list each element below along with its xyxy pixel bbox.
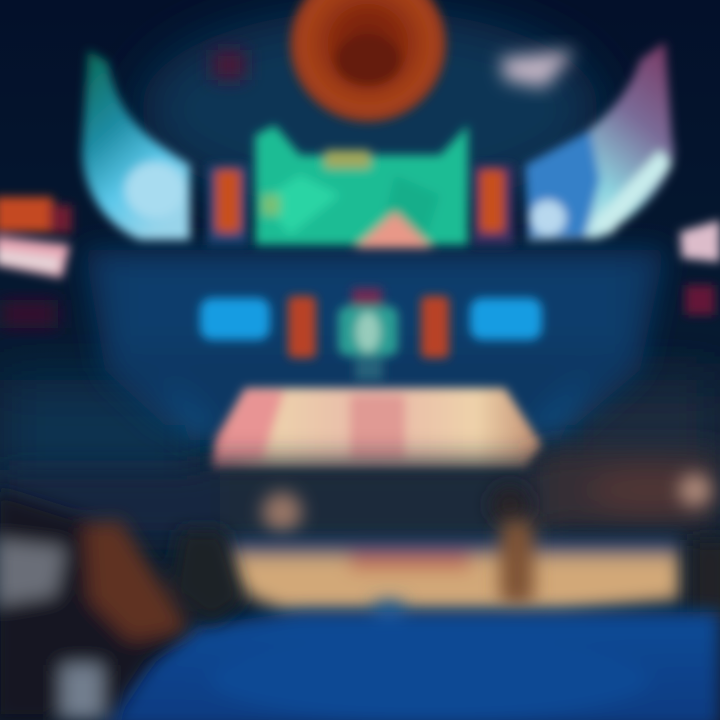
left middle orange bar <box>288 296 316 358</box>
basketball court <box>225 540 680 612</box>
blue floor <box>105 612 720 720</box>
arena upper glow <box>0 10 720 490</box>
basketball <box>290 0 446 122</box>
players on court <box>375 520 720 655</box>
small left lights <box>0 300 58 328</box>
left flag <box>0 197 72 278</box>
right flag <box>680 220 720 315</box>
left orange bar <box>207 165 248 245</box>
lower cream sign <box>212 388 542 470</box>
left wing <box>82 50 190 240</box>
crowd band <box>0 450 720 547</box>
right orange bar <box>472 165 514 245</box>
right wing <box>525 42 674 240</box>
foreground spectators <box>0 490 245 720</box>
top small lights <box>212 50 575 88</box>
scoreboard lower panel <box>85 250 665 440</box>
right blue pill <box>470 298 542 340</box>
figures on court <box>262 474 711 532</box>
right middle orange bar <box>421 296 449 358</box>
central small screen <box>338 288 398 380</box>
central green screen <box>255 125 468 248</box>
left blue pill <box>200 298 270 340</box>
